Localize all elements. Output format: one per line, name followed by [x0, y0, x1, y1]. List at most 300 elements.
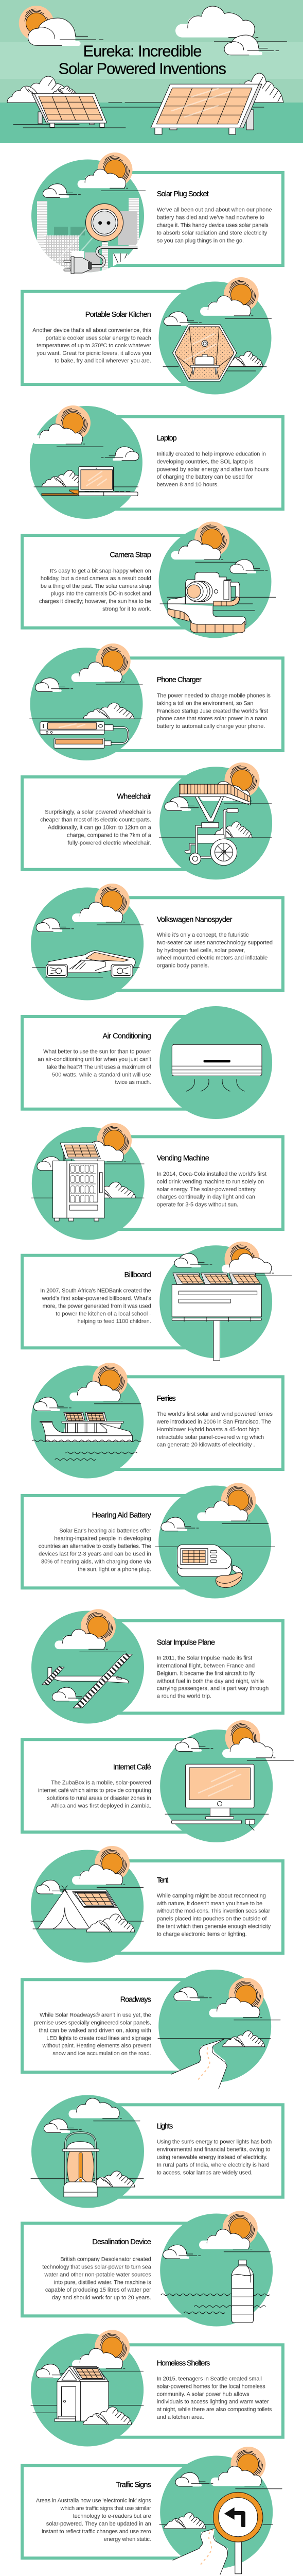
frame: [22, 2466, 217, 2558]
circle background: [160, 1730, 273, 1842]
ground: [0, 103, 303, 143]
frame: [22, 1739, 217, 1832]
heading: Tent: [157, 1876, 168, 1885]
circle background: [158, 281, 272, 395]
frame: [88, 1621, 283, 1713]
body text: The ZubaBox is a mobile, solar-powered: [51, 1780, 151, 1786]
icon: laptop: [42, 467, 138, 496]
frame: [87, 173, 283, 265]
icon: small cloud: [43, 184, 80, 198]
horizon line: [159, 2524, 273, 2525]
frame: [87, 1861, 283, 1953]
circle background: [31, 2334, 144, 2446]
body text: and a kitchen area.: [157, 2414, 204, 2420]
title: Solar Powered Inventions: [59, 59, 226, 77]
body text: into pure, distilled water. The machine is: [54, 2279, 151, 2285]
heading: Vending Machine: [157, 1155, 209, 1163]
icon: header sun: [19, 6, 54, 41]
icon: air flow lines: [186, 1079, 244, 1091]
icon: sun: [98, 152, 133, 188]
body text: It's easy to get a bit snap-happy when on: [50, 568, 151, 574]
icon: large cloud: [211, 2466, 282, 2489]
icon: small cloud: [37, 1157, 75, 1171]
body text: that can be walked and driven on, along with: [39, 2027, 151, 2033]
body text: more, the power generated from it was used: [43, 1303, 151, 1310]
body text: In 2014, Coca-Cola installed the world's first: [157, 1171, 266, 1177]
heading: Camera Strap: [110, 551, 151, 560]
body text: Surprisingly, a solar powered wheelchair is: [45, 809, 151, 816]
body text: fully-powered electric wheelchair.: [68, 840, 151, 846]
body text: be a thing of the past. The solar camera strap: [41, 583, 151, 589]
body text: without paint. Heating elements also prevent: [42, 2043, 151, 2049]
body text: which are traffic signs that use similar: [60, 2505, 151, 2512]
icon: small cloud: [44, 2119, 81, 2133]
body text: without fuel in both the day and night, while: [156, 1678, 264, 1684]
icon: hearing aid: [177, 1545, 242, 1588]
frame: [88, 2105, 283, 2197]
horizon line: [31, 2178, 144, 2179]
frame: [22, 2223, 217, 2316]
icon: billboard: [172, 1273, 261, 1361]
circle background: [160, 2213, 273, 2327]
body text: capable of producing 15 litres of water per: [45, 2287, 151, 2293]
body text: water and other non-potable water sources: [44, 2272, 151, 2278]
body text: twice as much.: [115, 1079, 151, 1086]
icon: header hatched cloud left: [7, 76, 75, 103]
body text: [34, 2012, 151, 2057]
waves: [32, 1440, 141, 1460]
panel: solar impulse plane: [31, 1609, 283, 1724]
sky background: [0, 0, 303, 103]
body text: technology that uses solar-power to turn sea: [42, 2264, 152, 2270]
waves: [161, 2294, 270, 2314]
body text: [156, 1655, 269, 1700]
icon: large cloud: [72, 1865, 144, 1887]
frame: [22, 1256, 216, 1348]
body text: an air-conditioning unit for when you just can't: [38, 1057, 151, 1063]
body text: the tent which then generate enough electricity: [157, 1924, 271, 1930]
body text: [156, 1893, 271, 1938]
icon: sun: [96, 643, 131, 679]
heading: Roadways: [120, 1995, 151, 2004]
horizon line: [158, 2038, 271, 2039]
body text: between 8 and 10 hours.: [157, 482, 219, 488]
body text: battery has died and we've had nowhere to: [157, 215, 264, 221]
icon: hatched cloud: [83, 703, 134, 719]
icon: solar cooker: [173, 325, 237, 381]
icon: header top right cloud: [175, 6, 287, 42]
body text: panels placed into pouches on the outside of: [157, 1916, 267, 1922]
body text: Francisco startup Juse created the world's first: [157, 708, 268, 714]
horizon lines: [163, 367, 266, 371]
panel: solar plug socket: [31, 152, 283, 274]
body text: at night, while there are also composting toilets: [157, 2406, 272, 2413]
icon: solar plane: [42, 1654, 132, 1708]
icon: small cloud: [163, 2245, 201, 2259]
body text: countries an alternative to costly batteries. The: [39, 1544, 151, 1550]
body text: Africa and was first deployed in Zambia.: [51, 1803, 151, 1809]
icon: hatched cloud: [86, 1914, 135, 1932]
circle background: [31, 1611, 144, 1724]
body text: solar-powered. They can be updated in an: [46, 2521, 151, 2527]
ground lines: [13, 103, 283, 128]
frame: [22, 1496, 215, 1588]
body text: by hydrogen fuel cells, solar power,: [157, 947, 245, 954]
body text: The world's first solar and wind powered ferries: [157, 1411, 273, 1417]
icon: tent: [38, 1886, 131, 1929]
icon: large cloud: [200, 296, 272, 318]
panel: camera strap: [22, 521, 276, 638]
horizon line: [159, 837, 272, 838]
heading: Billboard: [124, 1271, 151, 1279]
icon: solar lantern: [62, 2132, 99, 2197]
icon: header small right cloud: [224, 35, 279, 55]
panel: portable solar kitchen: [22, 277, 272, 395]
body text: [38, 1049, 152, 1086]
horizon line: [30, 718, 142, 719]
icon: small cloud: [165, 797, 202, 811]
heading: Solar Impulse Plane: [157, 1638, 215, 1647]
icon: small cloud: [36, 1880, 74, 1894]
body text: charges it directly; however, the sun has to be: [39, 598, 151, 604]
icon: plug socket: [85, 204, 123, 241]
body text: premise uses specially engineered solar panels,: [34, 2020, 151, 2026]
city skyline: [37, 198, 139, 273]
circle background: [31, 887, 144, 1001]
body text: charges continually in day light and can: [157, 1194, 255, 1200]
body text: Another device that's all about convenience, this: [32, 327, 151, 333]
icon: large cloud: [222, 1738, 294, 1760]
icon: small cloud: [174, 1987, 211, 2001]
icon: sun: [95, 1846, 130, 1881]
icon: sun: [56, 405, 91, 440]
body text: day and should work for up to 20 years.: [52, 2295, 151, 2301]
body text: using renewable energy instead of electricity.: [157, 2155, 268, 2161]
icon: small cloud: [164, 312, 202, 326]
body text: of charging the battery can be used for: [157, 474, 253, 480]
panel: wheelchair: [22, 762, 272, 879]
circle background: [158, 526, 272, 638]
icon: small cloud: [36, 2364, 74, 2378]
heading: Air Conditioning: [103, 1032, 151, 1041]
icon: small cloud: [36, 918, 74, 932]
frame: [87, 1377, 283, 1469]
body text: In 2011, the Solar Impulse made its first: [157, 1655, 252, 1661]
icon: concept car: [46, 951, 135, 977]
icon: hatched cloud: [164, 2513, 206, 2529]
icon: large cloud: [72, 662, 142, 685]
body text: taking a toll on the environment, so San: [157, 700, 253, 706]
horizon line: [31, 1197, 144, 1198]
body text: helping to feed 1100 children.: [78, 1318, 151, 1325]
body text: so you can plug things in on the go.: [157, 238, 244, 244]
heading: Solar Plug Socket: [157, 190, 209, 198]
icon: sun: [97, 1123, 132, 1158]
panel: air conditioning: [22, 1006, 272, 1119]
icon: large cloud: [55, 1629, 126, 1652]
body text: We've all been out and about when our phone: [157, 207, 272, 213]
icon: sun: [194, 521, 229, 556]
icon: header left cloud: [28, 18, 103, 46]
circle background: [158, 1486, 271, 1598]
body text: solar-powered homes for the local homeless: [157, 2383, 265, 2389]
icon: sun: [224, 277, 259, 312]
icon: air conditioning unit: [172, 1044, 262, 1076]
body text: powered by solar energy and after two hours: [157, 466, 269, 472]
icon: large cloud: [209, 1997, 280, 2020]
heading: Ferries: [157, 1395, 176, 1403]
icon: hatched cloud: [42, 470, 88, 487]
horizon lines: [31, 2405, 144, 2413]
horizon lines: [160, 597, 276, 611]
frame: [22, 1979, 215, 2072]
body text: you want. Great for picnic lovers, it allows you: [37, 350, 151, 357]
body text: to bake, fry and boil wherever you are.: [55, 358, 151, 364]
icon: large solar panel: [151, 84, 262, 134]
body text: portable cooker uses solar energy to reach: [46, 335, 151, 341]
icon: sun: [93, 1363, 128, 1398]
body text: While camping might be about reconnecting: [157, 1893, 266, 1899]
body text: [40, 1288, 151, 1325]
body text: [36, 2498, 151, 2543]
body text: 500 watts, while a standard unit will use: [52, 1072, 151, 1078]
panel: desalination device: [22, 2211, 273, 2327]
circle background: [159, 767, 272, 879]
body text: instant to reflect traffic changes and use zero: [42, 2529, 151, 2535]
circle background: [159, 1245, 272, 1358]
circle background: [31, 160, 144, 272]
body text: snow and ice accumulation on the road.: [52, 2050, 151, 2057]
icon: sun: [224, 762, 259, 798]
heading: Desalination Device: [92, 2238, 151, 2246]
panel: homeless shelters: [31, 2330, 283, 2446]
frame: [22, 292, 215, 384]
frame: [22, 777, 216, 870]
circle background: [31, 1365, 144, 1479]
icon: large cloud: [68, 2098, 140, 2121]
panel: lights: [31, 2095, 283, 2208]
heading: Wheelchair: [117, 793, 151, 801]
body text: Solar Ear's hearing aid batteries offer: [59, 1528, 151, 1534]
body text: organic body panels.: [157, 963, 209, 969]
body text: charge, compared to the 7km of a: [67, 833, 152, 839]
icon: winding road: [171, 2039, 227, 2089]
icon: small solar panel: [32, 94, 107, 127]
body text: Areas in Australia now use 'electronic ink' signs: [36, 2498, 151, 2504]
body text: to power the kitchen of a local school -: [56, 1311, 151, 1317]
body text: [42, 2257, 152, 2301]
body text: solar energy. The solar-powered battery: [157, 1187, 256, 1193]
icon: small cloud: [33, 1397, 71, 1411]
body text: Belgium. It became the first aircraft to fly: [157, 1670, 255, 1676]
body text: [157, 207, 272, 244]
body text: While Solar Roadways® aren't in use yet, the: [40, 2012, 151, 2018]
header banner: [0, 0, 303, 143]
circle background: [32, 1127, 145, 1240]
icon: small cloud: [52, 1687, 90, 1701]
body text: While it's only a concept, the futuristic: [157, 932, 249, 938]
body text: temperatures of up to 370ºC to cook whatever: [37, 343, 151, 349]
circle background: [160, 2455, 273, 2569]
body text: In 2007, South Africa's NEDBank created the: [40, 1288, 151, 1294]
icon: sun: [95, 2330, 130, 2365]
body text: cheaper than most of its electric counterparts.: [40, 817, 151, 823]
body text: battery to automatically charge your phone.: [157, 723, 265, 730]
body text: [157, 692, 271, 730]
heading: Portable Solar Kitchen: [85, 311, 151, 319]
icon: plug and cable: [64, 247, 138, 274]
icon: large cloud: [69, 1381, 141, 1404]
icon: traffic sign: [213, 2492, 263, 2574]
horizon line: [34, 486, 138, 487]
icon: hatched cloud: [223, 2031, 265, 2047]
body text: [40, 809, 152, 846]
panel: ferries: [31, 1363, 283, 1479]
icon: sun: [223, 2211, 258, 2246]
icon: hatched cloud: [89, 2171, 135, 2187]
body text: technology to e-readers but are: [73, 2513, 151, 2519]
heading: Volkswagen Nanospyder: [157, 916, 233, 924]
frame: [22, 535, 215, 628]
icon: large cloud: [199, 2229, 271, 2252]
frame: [86, 658, 283, 751]
circle background: [30, 648, 143, 760]
icon: sun: [224, 1242, 259, 1277]
body text: to access, solar lamps are widely used.: [157, 2170, 253, 2176]
circle background: [159, 1006, 272, 1119]
horizon lines: [31, 1921, 144, 1929]
icon: hatched cloud: [226, 351, 263, 366]
icon: sun: [225, 1720, 260, 1755]
panel: internet cafe: [22, 1720, 294, 1842]
body text: In 2015, teenagers in Seattle created small: [157, 2376, 262, 2382]
body text: take the heat?! The unit uses a maximum of: [47, 1064, 152, 1071]
body text: environmental and financial benefits, owing to: [157, 2147, 271, 2153]
frame: [88, 1137, 283, 1229]
body text: [39, 1528, 152, 1572]
body text: the sun, light or a phone plug.: [78, 1566, 151, 1572]
icon: large cloud: [197, 1501, 269, 1523]
panel: volkswagen nanospyder: [31, 884, 283, 1001]
body text: Hornblower Hybrid boasts a 45-foot high: [157, 1427, 259, 1433]
panel: tent: [31, 1846, 283, 1963]
window glare: [54, 211, 116, 273]
body text: charge it. This handy device uses solar panels: [157, 223, 269, 229]
panel: phone charger: [30, 643, 283, 760]
horizon line: [155, 1546, 275, 1547]
icon: small cloud: [101, 447, 139, 461]
body text: developing countries, the SOL laptop is: [157, 459, 254, 465]
body text: [157, 1171, 266, 1208]
icon: sun: [95, 884, 130, 919]
body text: carrying passengers, and is part way through: [157, 1686, 269, 1692]
body text: to charge electronic items or lighting.: [157, 1931, 247, 1938]
body text: world's first solar-powered billboard. What's: [41, 1295, 151, 1301]
body text: holiday, but a dead camera as a result could: [41, 575, 151, 582]
icon: large cloud: [73, 1141, 144, 1164]
body text: In rural parts of India, where electricity is hard: [157, 2162, 270, 2168]
icon: phone chargers with cable: [40, 722, 128, 748]
body text: [38, 1780, 151, 1809]
icon: hatched cloud: [83, 2407, 132, 2425]
body text: to absorb solar radiation and store electricity: [157, 230, 268, 236]
icon: hatched cloud: [212, 822, 252, 838]
body text: [39, 568, 151, 612]
body text: cold drink vending machine to run solely on: [157, 1179, 264, 1185]
icon: solar wheelchair: [180, 784, 272, 866]
body text: solutions to rural areas or disaster zones in: [47, 1795, 151, 1802]
horizon line: [165, 1814, 269, 1815]
circle background: [31, 1850, 144, 1963]
body text: hearing-impaired people in developing: [54, 1536, 151, 1542]
body text: retractable solar panel-covered wing which: [157, 1434, 264, 1440]
body text: The power needed to charge mobile phones is: [157, 692, 271, 699]
body text: [156, 1411, 273, 1448]
icon: small cloud: [35, 678, 73, 692]
body text: phone case that stores solar power in a nano: [157, 716, 268, 722]
road lines: [32, 968, 139, 977]
body text: [156, 932, 273, 969]
heading: Lights: [157, 2122, 173, 2130]
icon: water bottle: [231, 2260, 253, 2323]
body text: individuals to access lighting and warm water: [157, 2399, 269, 2405]
heading: Laptop: [157, 434, 177, 443]
heading: Traffic Signs: [116, 2481, 151, 2489]
body text: [157, 451, 269, 488]
icon: camera with strap: [168, 572, 246, 633]
icon: small cloud: [230, 560, 268, 573]
body text: energy when static.: [104, 2536, 151, 2543]
frame: [86, 417, 283, 509]
heading: Hearing Aid Battery: [92, 1512, 152, 1520]
icon: sun: [230, 2447, 265, 2482]
icon: sun: [228, 1978, 263, 2013]
icon: large cloud: [78, 169, 146, 191]
panel: vending machine: [31, 1123, 283, 1240]
body text: [32, 327, 151, 364]
icon: sun: [81, 1609, 116, 1644]
icon: large cloud: [72, 2348, 144, 2371]
body text: devices last for 2-3 years and can be used in: [39, 1551, 151, 1557]
circle background: [31, 2095, 144, 2208]
body text: plugs into the camera's DC-in socket and: [51, 591, 151, 597]
lighter sky band: [0, 42, 303, 79]
icon: header hatched cloud small: [51, 86, 77, 96]
panel: billboard: [22, 1242, 292, 1361]
body text: can generate 20 kilowatts of electricity .: [157, 1442, 255, 1448]
icon: desktop computer: [172, 1764, 255, 1831]
icon: small cloud: [175, 1738, 213, 1752]
icon: vending machine: [53, 1143, 104, 1221]
body text: a round the world trip.: [157, 1693, 211, 1700]
icon: large cloud: [222, 1253, 292, 1276]
body text: LED lights to create road lines and signage: [46, 2035, 151, 2041]
heading: Internet Café: [113, 1763, 151, 1771]
icon: winding road: [173, 2529, 228, 2574]
body text: What better to use the sun for than to power: [43, 1049, 151, 1055]
icon: small cloud: [161, 1517, 199, 1531]
icon: small cloud: [174, 1253, 212, 1267]
circle background: [30, 406, 142, 519]
body text: were introduced in 2006 in San Francisco. The: [156, 1419, 271, 1425]
heading: Phone Charger: [157, 676, 202, 684]
body text: Initially created to help improve education in: [157, 451, 266, 457]
body text: [157, 2376, 272, 2420]
body text: without the mod-cons. This invention sees solar: [156, 1908, 271, 1914]
icon: hatched cloud: [85, 1182, 136, 1198]
body text: operate for 3-5 days without sun.: [157, 1202, 238, 1208]
panel: hearing aid battery: [22, 1483, 275, 1598]
